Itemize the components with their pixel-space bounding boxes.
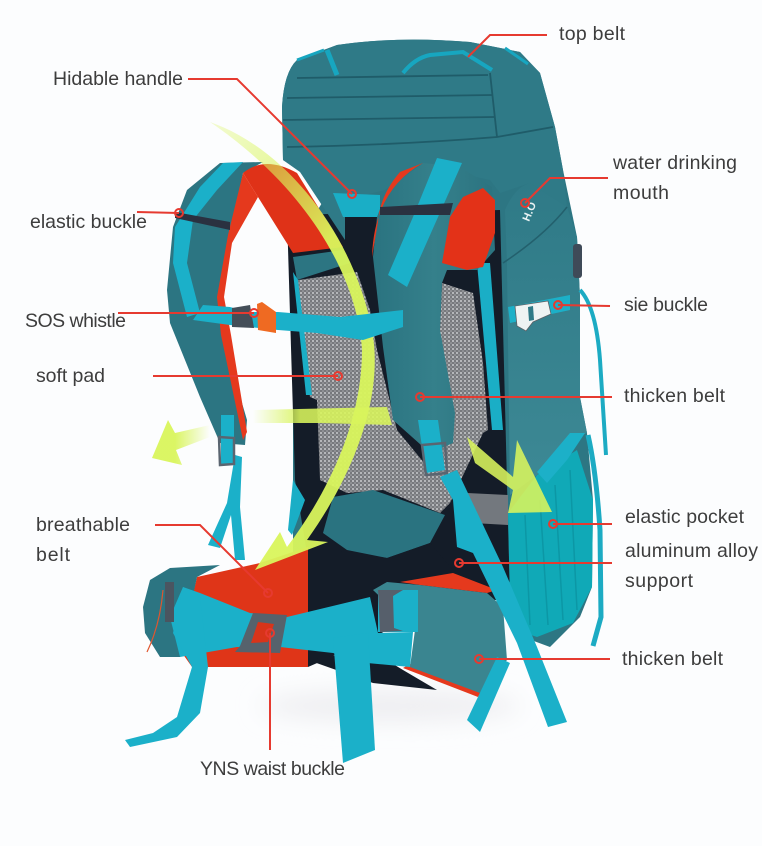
- centre hanging strap: [333, 633, 375, 763]
- right mesh pad: [430, 283, 488, 503]
- left mesh pad: [298, 272, 450, 513]
- right strap adjuster: [418, 420, 447, 475]
- pocket pleats: [525, 470, 577, 625]
- label: support: support: [625, 570, 694, 592]
- arrow: green flow downward: [210, 122, 375, 570]
- leader: breathable belt: [155, 525, 272, 597]
- elastic band right: [380, 203, 453, 215]
- label: aluminum alloy: aluminum alloy: [625, 540, 758, 562]
- waist buckle: [235, 613, 287, 653]
- short hip strap: [467, 657, 510, 732]
- right hip pad: [373, 582, 507, 693]
- leader: thicken belt lower: [475, 655, 610, 663]
- leader: elastic pocket: [549, 520, 612, 528]
- label: YNS waist buckle: YNS waist buckle: [200, 758, 345, 780]
- ground shadow: [260, 690, 520, 722]
- right shoulder red lining: [442, 188, 495, 270]
- hip mesh block: [308, 543, 453, 667]
- dark back panel: [287, 210, 510, 600]
- label: thicken belt lower: thicken belt: [622, 648, 724, 670]
- right hip red rim: [400, 573, 497, 593]
- long right strap: [440, 470, 567, 727]
- leader: side buckle: [554, 301, 610, 309]
- label: elastic buckle: elastic buckle: [30, 211, 147, 233]
- lower teal flap: [323, 490, 445, 558]
- right side straps: [580, 290, 606, 646]
- sternum strap and whistle: [193, 302, 403, 340]
- label: top belt: top belt: [559, 23, 626, 45]
- label: water drinking: water drinking: [612, 152, 737, 174]
- thin teal back strips: [477, 263, 503, 430]
- leader: aluminum alloy support: [455, 559, 612, 567]
- waist strap: [170, 587, 413, 667]
- gray support band: [467, 493, 508, 525]
- side buckle: [508, 244, 582, 331]
- H2O mark: H.O: [521, 200, 539, 223]
- leader: elastic buckle: [137, 209, 183, 217]
- hip belt left cap: [143, 565, 220, 657]
- elastic pocket: [508, 450, 593, 637]
- leader: waist buckle: [266, 629, 274, 750]
- left hanging strap: [125, 587, 208, 747]
- label: belt: belt: [36, 544, 71, 566]
- upper right teal strap: [388, 158, 462, 287]
- left strap adjuster: [219, 415, 234, 465]
- leader: soft pad: [153, 372, 342, 380]
- arrow: green flow centre shaft: [253, 407, 392, 425]
- top belts: [297, 48, 528, 75]
- backpack illustration: [125, 40, 606, 763]
- leader: hidable handle: [188, 79, 356, 198]
- side panel: [505, 183, 587, 495]
- shoulder hanging strap: [208, 455, 245, 560]
- lid and upper body: [282, 40, 567, 240]
- label: elastic pocket: elastic pocket: [625, 506, 745, 528]
- leader: water drinking mouth: [521, 178, 608, 207]
- arrow: green flow left: [152, 420, 210, 465]
- left strap teal band: [173, 162, 243, 317]
- red pad left: [243, 164, 343, 253]
- arrow: green flow right: [467, 437, 552, 513]
- pocket strap: [537, 433, 585, 483]
- label: SOS whistle: SOS whistle: [25, 310, 126, 332]
- leader lines: [118, 35, 612, 750]
- elastic band left: [175, 212, 230, 230]
- label: soft pad: soft pad: [36, 365, 105, 387]
- leader: top belt: [468, 35, 547, 57]
- label: breathable: breathable: [36, 514, 130, 536]
- left shoulder strap: [167, 162, 263, 445]
- lid fold lines: [283, 73, 553, 147]
- main body: [282, 40, 593, 647]
- left shoulder red lining: [217, 173, 258, 440]
- label: thicken belt upper: thicken belt: [624, 385, 726, 407]
- label: mouth: mouth: [613, 182, 669, 204]
- left cap buckle: [147, 582, 174, 652]
- top hip connector strap: [333, 193, 380, 217]
- leader: SOS whistle: [118, 309, 258, 317]
- leader: thicken belt upper: [416, 393, 612, 401]
- hip strap adjuster: [378, 590, 418, 632]
- right shoulder pad: [373, 163, 495, 453]
- body shoulder connector: [293, 250, 350, 280]
- side panel flap seam: [503, 207, 567, 263]
- label: sie buckle: sie buckle: [624, 294, 708, 316]
- label: hidable handle: Hidable handle: [53, 68, 183, 90]
- hip pad red: [180, 547, 308, 667]
